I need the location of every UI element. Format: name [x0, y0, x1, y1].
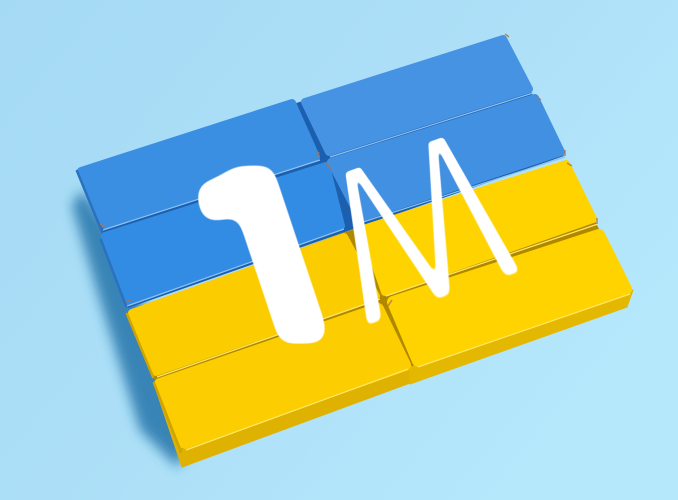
gap underlay: blue rows: [80, 37, 564, 308]
gap underlay: yellow rows: [128, 162, 630, 450]
block edge highlights: [103, 93, 630, 450]
block: third left yellow: [132, 237, 376, 372]
block: third right yellow: [363, 164, 593, 292]
block: fourth right yellow: [393, 235, 626, 361]
block: second left blue: [105, 166, 341, 302]
side face: lower right yellow block: [409, 290, 633, 384]
numeral 1: 1: [151, 143, 395, 376]
letter M: M: [205, 127, 475, 224]
side face: lower left yellow block: [154, 366, 412, 467]
block left edges: [77, 171, 181, 452]
block: upper right blue: [305, 39, 529, 152]
block: second right blue: [331, 98, 561, 218]
blocks: blue and yellow flag: [80, 37, 633, 467]
block: upper left blue: [81, 103, 316, 225]
worn corners: [100, 34, 597, 306]
block: fourth left yellow: [160, 309, 405, 443]
block shadow: [72, 190, 190, 468]
